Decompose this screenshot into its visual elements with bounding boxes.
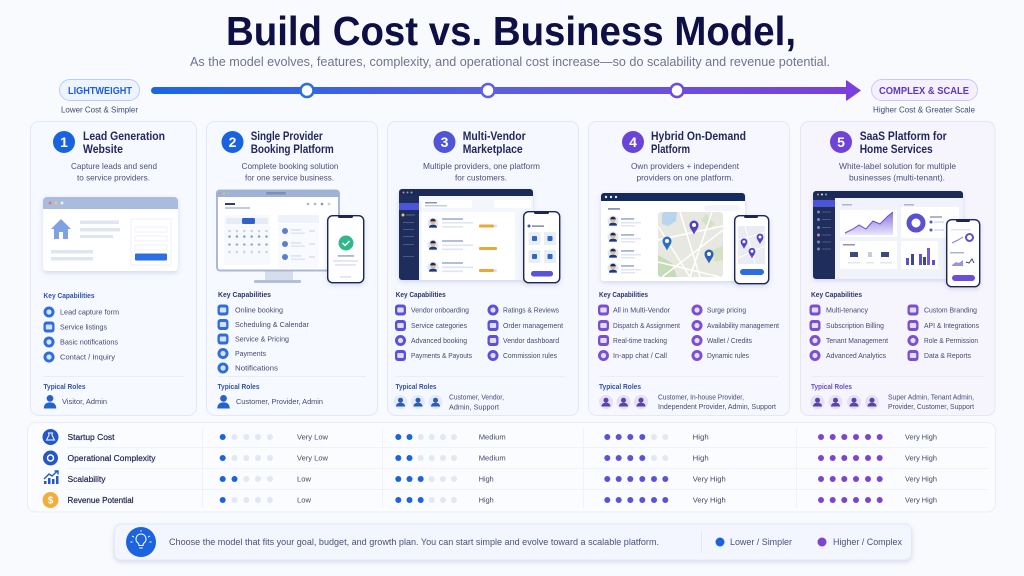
typical roles: Typical Roles: [599, 382, 641, 391]
typical roles: [217, 382, 323, 408]
legend: Higher / Complex: [833, 537, 902, 547]
row: operational complexity: High: [693, 454, 709, 462]
row: revenue potential: $: [48, 496, 54, 506]
key capabilities: Advanced booking: [411, 336, 467, 345]
start pill: lightweight: [60, 80, 140, 114]
typical roles: Admin, Support: [449, 402, 499, 412]
description: Complete booking solution: [242, 161, 339, 171]
key capabilities: Real-time tracking: [613, 336, 667, 345]
heading: [860, 131, 947, 156]
typical roles: Visitor, Admin: [62, 397, 107, 406]
row: startup cost: Very High: [905, 432, 937, 442]
start pill: lightweight: Lower Cost & Simpler: [61, 106, 138, 114]
description: [242, 161, 339, 182]
typical roles: Customer, Vendor,: [449, 392, 504, 402]
description: Multiple providers, one platform: [423, 161, 540, 171]
key capabilities: Subscription Billing: [826, 321, 884, 330]
arrow line: [151, 80, 861, 101]
number badge 3: [434, 131, 456, 153]
description: White-label solution for multiple: [839, 161, 956, 171]
key capabilities: Key Capabilities: [396, 290, 446, 299]
key capabilities: [44, 291, 119, 362]
key capabilities: Vendor dashboard: [503, 336, 559, 345]
callout text: Choose the model that fits your goal, budget, and growth plan. You can start simple and evolve toward a scalable platform.: [169, 537, 659, 547]
row: operational complexity: Very High: [905, 454, 937, 462]
key capabilities: Multi-tenancy: [826, 306, 868, 314]
heading: Platform: [651, 144, 690, 156]
start pill: lightweight: LIGHTWEIGHT: [68, 86, 132, 97]
mockup: marketplace dashboard and phone: [399, 189, 560, 283]
row: operational complexity: Operational Complexity: [68, 454, 156, 463]
typical roles: [394, 382, 504, 412]
typical roles: Typical Roles: [396, 382, 436, 391]
number badge 2: 2: [229, 134, 237, 150]
mockup: desktop and phone booking: [216, 190, 364, 283]
panel: multi-vendor marketplace: [388, 122, 578, 416]
number badge 1: [53, 131, 75, 153]
row: revenue potential: High: [479, 496, 494, 504]
typical roles: Typical Roles: [218, 382, 260, 391]
heading: Booking Platform: [251, 144, 334, 156]
key capabilities: Custom Branding: [924, 306, 977, 314]
typical roles: [44, 382, 107, 408]
row: operational complexity: Very Low: [297, 454, 328, 462]
typical roles: Provider, Customer, Support: [888, 402, 974, 411]
number badge 4: [622, 131, 644, 153]
number badge 3: 3: [441, 134, 449, 150]
row: startup cost: Very Low: [297, 432, 328, 442]
key capabilities: Service categories: [411, 321, 467, 330]
heading: Single Provider: [251, 131, 323, 143]
comparison table: [28, 422, 996, 512]
number badge 1: 1: [60, 134, 68, 150]
typical roles: Typical Roles: [44, 382, 86, 391]
key capabilities: Online booking: [235, 306, 283, 314]
key capabilities: Wallet / Credits: [707, 336, 752, 345]
description: [631, 161, 740, 182]
key capabilities: Tenant Management: [826, 336, 888, 345]
description: providers on one platform.: [636, 172, 734, 182]
panel: saas platform for home services: [800, 122, 995, 416]
legend: [716, 537, 902, 547]
row: revenue potential: Revenue Potential: [68, 496, 134, 505]
key capabilities: Commission rules: [503, 351, 557, 360]
heading: [463, 131, 526, 156]
description: Own providers + independent: [631, 161, 740, 171]
key capabilities: Scheduling & Calendar: [235, 320, 310, 329]
key capabilities: [598, 290, 779, 361]
key capabilities: Payments: [235, 349, 266, 358]
mockup: analytics dashboard and phone: [813, 191, 980, 287]
key capabilities: Service & Pricing: [235, 334, 289, 344]
key capabilities: Dynamic rules: [707, 351, 749, 360]
row: startup cost: High: [693, 432, 709, 442]
typical roles: [810, 382, 974, 411]
heading: SaaS Platform for: [860, 131, 947, 143]
heading: [251, 131, 334, 156]
key capabilities: Service listings: [60, 322, 107, 332]
number badge 5: 5: [837, 134, 845, 150]
number badge 2: [222, 131, 244, 153]
subtitle: As the model evolves, features, complexity, and operational cost increase—so do scalability and revenue potential.: [190, 54, 830, 69]
key capabilities: Vendor onboarding: [411, 306, 469, 314]
key capabilities: [395, 290, 563, 361]
typical roles: Independent Provider, Admin, Support: [658, 402, 776, 411]
icon: light bulb: [126, 527, 156, 557]
row: scalability: High: [479, 474, 494, 484]
typical roles: Typical Roles: [811, 382, 852, 391]
key capabilities: Ratings & Reviews: [503, 306, 559, 314]
key capabilities: [810, 290, 979, 361]
panel: hybrid on-demand platform: [588, 122, 790, 416]
typical roles: Customer, In-house Provider,: [658, 392, 744, 402]
description: Capture leads and send: [71, 161, 157, 171]
key capabilities: Availability management: [707, 321, 779, 330]
heading: Home Services: [860, 144, 933, 156]
description: for one service business.: [245, 172, 334, 182]
description: for customers.: [455, 172, 507, 182]
mockup: map dashboard and phone: [601, 193, 769, 284]
key capabilities: Contact / Inquiry: [60, 352, 115, 362]
heading: Hybrid On-Demand: [651, 131, 746, 143]
title: Build Cost vs. Business Model,: [226, 8, 796, 54]
description: businesses (multi-tenant).: [849, 172, 945, 182]
key capabilities: Role & Permission: [924, 336, 978, 345]
panel: lead generation website: [30, 122, 196, 416]
heading: Website: [83, 144, 123, 156]
key capabilities: Dispatch & Assignment: [613, 321, 680, 330]
number badge 5: [830, 131, 852, 153]
row: startup cost: [42, 429, 937, 445]
row: scalability: [44, 471, 937, 484]
end pill: complex and scale: [872, 80, 978, 114]
row: revenue potential: Low: [297, 496, 312, 504]
typical roles: Super Admin, Tenant Admin,: [888, 392, 974, 402]
heading: Lead Generation: [83, 131, 165, 143]
heading: Marketplace: [463, 144, 523, 156]
key capabilities: Notifications: [235, 364, 278, 372]
key capabilities: Key Capabilities: [811, 290, 862, 299]
legend: Lower / Simpler: [730, 537, 792, 547]
row: revenue potential: [42, 492, 937, 508]
key capabilities: [218, 290, 310, 374]
key capabilities: Lead capture form: [60, 308, 119, 316]
mockup: website window: [43, 197, 178, 271]
row: scalability: Very High: [693, 474, 726, 484]
key capabilities: Order management: [503, 321, 563, 330]
row: startup cost: Medium: [479, 432, 506, 442]
key capabilities: Surge pricing: [707, 306, 746, 314]
row: scalability: Very High: [905, 474, 937, 484]
end pill: complex and scale: COMPLEX & SCALE: [879, 86, 969, 97]
description: [71, 161, 157, 182]
end pill: complex and scale: Higher Cost & Greater Scale: [873, 106, 976, 114]
heading: Multi-Vendor: [463, 131, 526, 143]
progress scale: [60, 80, 978, 114]
key capabilities: API & Integrations: [924, 321, 979, 330]
panel: single provider booking platform: [206, 122, 378, 416]
typical roles: Customer, Provider, Admin: [236, 397, 323, 406]
key capabilities: Key Capabilities: [44, 291, 94, 300]
callout bar: [114, 524, 912, 560]
heading: [651, 131, 746, 156]
row: operational complexity: Medium: [479, 454, 506, 462]
number badge 4: 4: [629, 134, 637, 150]
key capabilities: Basic notifications: [60, 338, 118, 346]
key capabilities: Key Capabilities: [218, 290, 271, 299]
key capabilities: Data & Reports: [924, 351, 971, 360]
heading: [83, 131, 165, 156]
key capabilities: Advanced Analytics: [826, 351, 886, 360]
row: scalability: Scalability: [68, 475, 106, 484]
row: scalability: Low: [297, 474, 312, 484]
row: revenue potential: Very High: [905, 496, 937, 504]
key capabilities: Key Capabilities: [599, 290, 648, 299]
typical roles: [599, 382, 776, 411]
key capabilities: Payments & Payouts: [411, 351, 472, 360]
key capabilities: In-app chat / Call: [613, 351, 667, 360]
row: revenue potential: Very High: [693, 496, 726, 504]
key capabilities: All in Multi-Vendor: [613, 306, 671, 314]
description: to service providers.: [77, 172, 150, 182]
description: [423, 161, 540, 182]
description: [839, 161, 956, 182]
row: startup cost: Startup Cost: [68, 433, 115, 442]
row: operational complexity: [43, 450, 937, 466]
